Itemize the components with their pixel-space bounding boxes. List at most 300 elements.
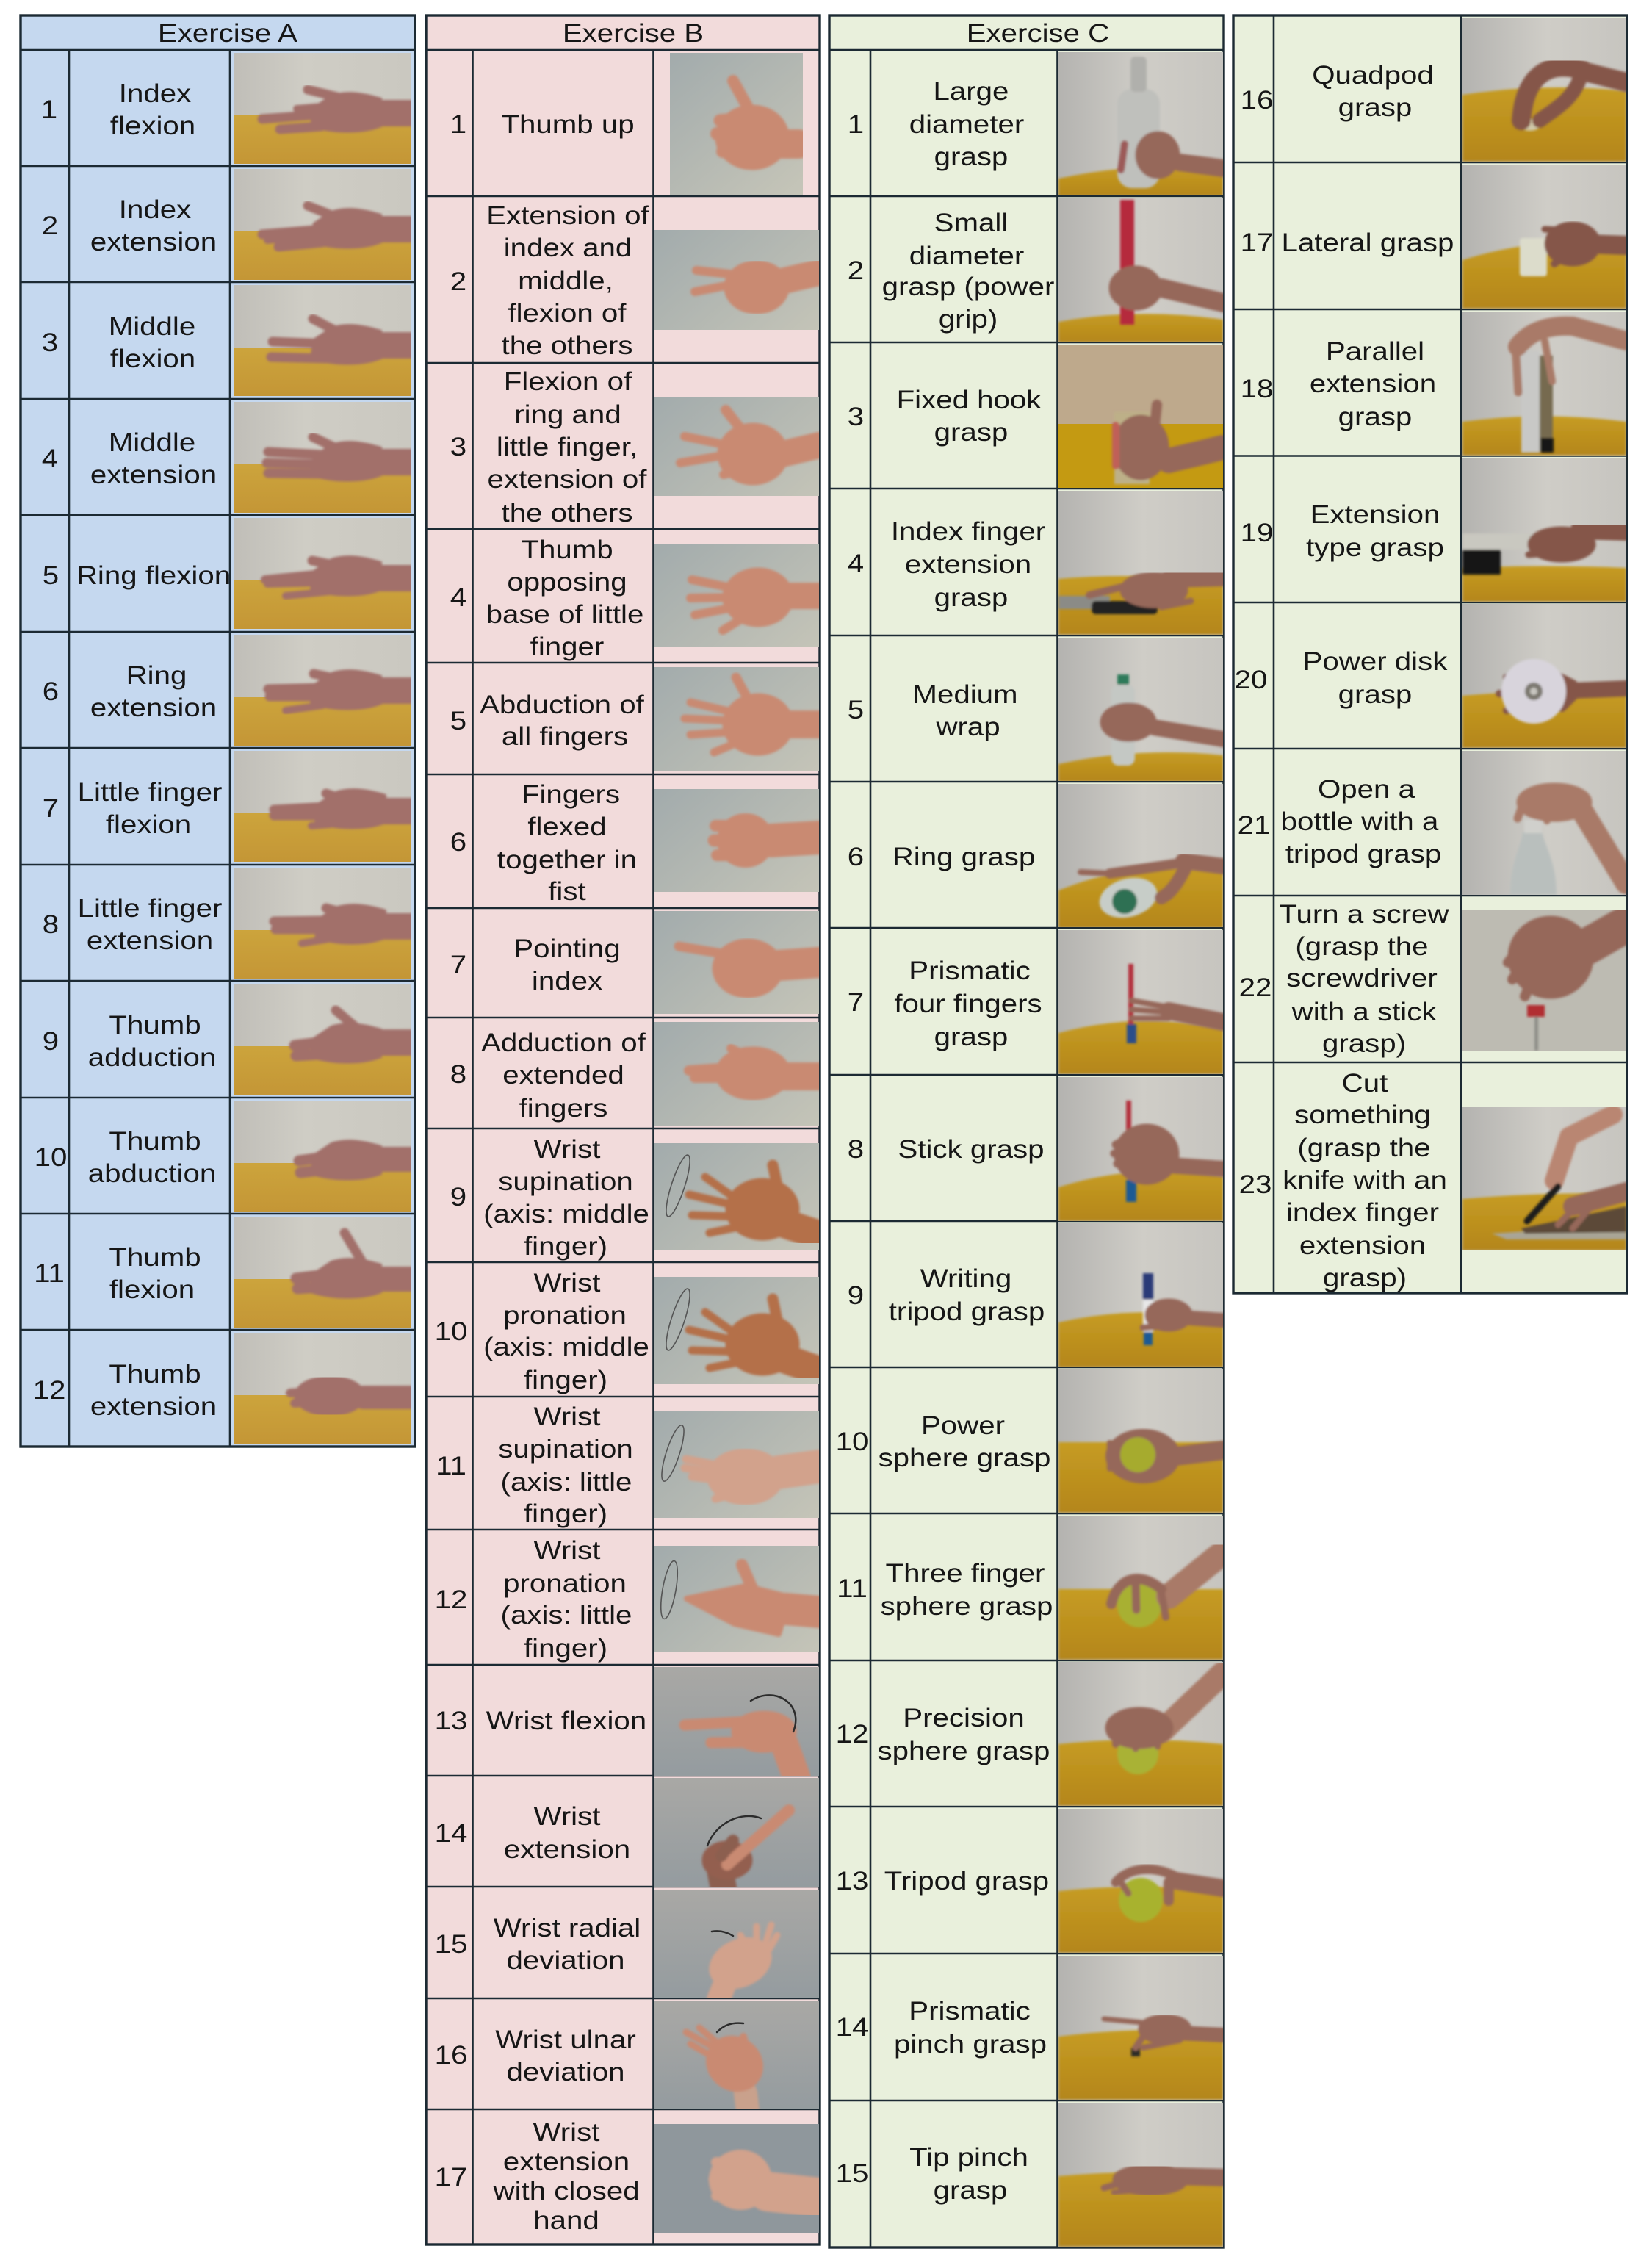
text: 10 Power sphere grasp: sphere grasp — [879, 1443, 1050, 1472]
text: 9 Thumb adduction: adduction — [88, 1043, 216, 1071]
row C7 — [848, 930, 1227, 1077]
text: 8 Stick grasp: 8 — [848, 1134, 864, 1163]
text: 11 Wrist supination (axis: little finger): finger) — [524, 1499, 607, 1527]
text: 7 Prismatic four fingers grasp: four fingers — [894, 989, 1042, 1018]
row C12 — [836, 1662, 1227, 1809]
text: 4 Index finger extension grasp: 4 — [848, 549, 864, 577]
text: 2 Extension of index and middle, flexion of the others: 2 — [450, 267, 466, 295]
photo: knife, index finger extension grasp — [1058, 491, 1227, 638]
text: 2 Extension of index and middle, flexion of the others: the others — [502, 331, 632, 359]
text: 14 Prismatic pinch grasp — [836, 1996, 1047, 2058]
text: 17 Wrist extension with closed hand: Wrist — [533, 2117, 600, 2146]
text: 2 Extension of index and middle, flexion of the others: middle, — [518, 266, 613, 295]
text: 7 Pointing index: index — [532, 966, 602, 995]
photo: wrist pronation, middle finger axis — [654, 1277, 819, 1384]
text: 23 Cut something (grasp the knife with an index finger extension grasp): something — [1294, 1100, 1431, 1128]
text: 3 Flexion of ring and little finger, extension of the others: 3 — [450, 432, 466, 461]
text: 3 Flexion of ring and little finger, extension of the others: ring and — [514, 400, 621, 428]
photo: power disk grasp, CD — [1462, 604, 1631, 751]
row B10 — [435, 1268, 823, 1424]
row B3 — [450, 367, 823, 544]
text: 7 Little finger flexion: flexion — [106, 810, 191, 838]
photo: precision sphere grasp — [1058, 1662, 1227, 1809]
row B5 — [450, 667, 823, 814]
text: 1 Index flexion: Index — [119, 79, 191, 107]
text: 4 Index finger extension grasp: Index finger — [891, 516, 1045, 545]
photo: wrist radial deviation — [654, 1890, 819, 1998]
text: 8 Adduction of extended fingers: 8 — [450, 1059, 466, 1088]
text: 12 Precision sphere grasp: 12 — [836, 1719, 868, 1748]
text: 13 Wrist flexion: 13 — [435, 1706, 467, 1735]
text: 23 Cut something (grasp the knife with an index finger extension grasp): extension — [1299, 1231, 1426, 1259]
photo: wrist flexion — [654, 1667, 819, 1776]
text: 3 Middle flexion: Middle — [109, 312, 195, 340]
text: 3 Fixed hook grasp: Fixed hook — [897, 385, 1042, 414]
photo: abduction of all fingers — [654, 667, 819, 771]
text: 8 Little finger extension: Little finger — [78, 893, 222, 922]
text: 19 Extension type grasp: 19 — [1241, 518, 1273, 547]
text: 21 Open a bottle with a tripod grasp — [1238, 774, 1441, 868]
heading: Exercise C: Exercise C — [967, 18, 1109, 47]
text: 12 Wrist pronation (axis: little finger): (axis: little — [501, 1600, 632, 1629]
text: 2 Index extension: extension — [90, 227, 217, 256]
row A2 — [42, 169, 411, 280]
photo: prismatic four fingers grasp — [1058, 930, 1227, 1077]
row C16 — [1241, 18, 1631, 165]
text: 6 Ring extension — [43, 660, 217, 721]
text: 16 Wrist ulnar deviation: Wrist ulnar — [495, 2025, 636, 2053]
text: 7 Pointing index — [450, 934, 621, 995]
text: 11 Thumb flexion: flexion — [109, 1275, 195, 1303]
text: 19 Extension type grasp: type grasp — [1306, 533, 1444, 561]
photo: prismatic pinch grasp — [1058, 1956, 1227, 2103]
text: 4 Thumb opposing base of little finger: finger — [530, 632, 604, 660]
photo: pointing index — [654, 911, 819, 1014]
text: 4 Middle extension — [42, 428, 217, 489]
text: 9 Writing tripod grasp: 9 — [848, 1281, 864, 1309]
text: 3 Flexion of ring and little finger, extension of the others: little finger, — [497, 432, 638, 461]
photo: ring flexion — [234, 518, 411, 629]
row B12 — [435, 1536, 823, 1693]
text: 1 Thumb up: 1 — [450, 109, 466, 138]
text: 15 Tip pinch grasp: grasp — [934, 2175, 1007, 2204]
text: 17 Wrist extension with closed hand: extension — [503, 2147, 630, 2175]
text: 1 Thumb up: Thumb up — [501, 109, 635, 138]
text: 1 Large diameter grasp — [848, 76, 1024, 170]
row C22 — [1239, 899, 1626, 1057]
row A10 — [35, 1101, 411, 1212]
photo: thumb extension — [234, 1333, 411, 1444]
text: 3 Fixed hook grasp: grasp — [934, 417, 1008, 446]
text: 23 Cut something (grasp the knife with an index finger extension grasp) — [1239, 1068, 1447, 1292]
text: 6 Fingers flexed together in fist: Fingers — [522, 780, 620, 808]
text: 21 Open a bottle with a tripod grasp: Open a — [1318, 774, 1415, 803]
text: 2 Small diameter grasp (power grip): 2 — [848, 256, 864, 284]
row A9 — [43, 984, 411, 1095]
text: 23 Cut something (grasp the knife with an index finger extension grasp): knife with an — [1283, 1165, 1447, 1194]
row C9 — [848, 1223, 1227, 1370]
text: 9 Writing tripod grasp — [848, 1264, 1045, 1325]
row A7 — [43, 751, 411, 862]
row C13 — [836, 1809, 1227, 1956]
text: 12 Thumb extension: extension — [90, 1392, 217, 1420]
row B9 — [450, 1134, 823, 1290]
text: 18 Parallel extension grasp: grasp — [1338, 402, 1412, 431]
text: 10 Power sphere grasp: Power — [921, 1411, 1005, 1439]
text: 5 Medium wrap: 5 — [848, 695, 864, 724]
text: 10 Thumb abduction: abduction — [88, 1159, 216, 1187]
text: 13 Tripod grasp: 13 — [836, 1866, 868, 1895]
text: 4 Thumb opposing base of little finger: Thumb — [521, 535, 613, 564]
text: 16 Quadpod grasp: Quadpod — [1312, 60, 1434, 89]
text: 22 Turn a screw (grasp the screwdriver with a stick grasp): with a stick — [1291, 997, 1437, 1026]
text: 6 Fingers flexed together in fist: fist — [548, 876, 586, 905]
text: 5 Medium wrap — [848, 680, 1018, 741]
photo: two fingers extended — [654, 230, 819, 330]
text: 23 Cut something (grasp the knife with an index finger extension grasp): 23 — [1239, 1170, 1272, 1198]
text: 13 Tripod grasp: Tripod grasp — [884, 1866, 1049, 1895]
text: 22 Turn a screw (grasp the screwdriver with a stick grasp): screwdriver — [1286, 963, 1438, 992]
text: 23 Cut something (grasp the knife with an index finger extension grasp): (grasp the — [1297, 1133, 1431, 1162]
row B7 — [450, 911, 823, 1058]
text: 4 Index finger extension grasp: grasp — [934, 583, 1008, 611]
row A5 — [43, 518, 411, 629]
text: 14 Wrist extension: 14 — [435, 1818, 467, 1847]
text: 12 Thumb extension: Thumb — [109, 1359, 201, 1388]
photo: index extension — [234, 169, 411, 280]
text: 4 Index finger extension grasp: extension — [905, 550, 1031, 578]
text: 7 Little finger flexion: 7 — [43, 793, 59, 822]
row C6 — [848, 784, 1227, 931]
photo: fist — [654, 789, 819, 892]
text: 6 Ring grasp: 6 — [848, 842, 864, 871]
text: 17 Wrist extension with closed hand: 17 — [435, 2162, 467, 2191]
text: 11 Thumb flexion: Thumb — [109, 1242, 201, 1271]
text: 8 Little finger extension: extension — [87, 926, 213, 954]
text: 3 Fixed hook grasp: 3 — [848, 402, 864, 431]
photo: wrist supination, middle finger axis — [654, 1143, 819, 1250]
text: 20 Power disk grasp: grasp — [1338, 680, 1412, 708]
text: 7 Prismatic four fingers grasp: Prismatic — [909, 956, 1031, 984]
text: 14 Wrist extension — [435, 1801, 630, 1863]
text: 22 Turn a screw (grasp the screwdriver with a stick grasp) — [1239, 899, 1449, 1057]
text: 9 Wrist supination (axis: middle finger): finger) — [524, 1231, 607, 1260]
text: 14 Prismatic pinch grasp: pinch grasp — [894, 2029, 1047, 2058]
text: 23 Cut something (grasp the knife with an index finger extension grasp): grasp) — [1323, 1263, 1407, 1292]
text: 11 Thumb flexion — [34, 1242, 201, 1303]
text: 17 Wrist extension with closed hand: with closed — [492, 2176, 640, 2205]
text: 8 Little finger extension: 8 — [43, 910, 59, 938]
text: 4 Thumb opposing base of little finger — [450, 535, 643, 660]
text: 7 Prismatic four fingers grasp: grasp — [934, 1022, 1008, 1051]
text: 1 Index flexion: 1 — [41, 95, 57, 123]
text: 19 Extension type grasp: Extension — [1310, 500, 1440, 528]
photo: little finger extension — [234, 868, 411, 979]
text: 3 Flexion of ring and little finger, extension of the others: Flexion of — [504, 367, 632, 395]
text: 11 Wrist supination (axis: little finger): Wrist — [534, 1402, 601, 1430]
text: 21 Open a bottle with a tripod grasp: 21 — [1238, 810, 1270, 839]
text: 6 Ring extension: 6 — [43, 677, 59, 705]
text: 7 Pointing index: 7 — [450, 950, 466, 979]
text: 23 Cut something (grasp the knife with an index finger extension grasp): index finger — [1286, 1198, 1439, 1226]
text: 6 Fingers flexed together in fist: flexed — [527, 812, 607, 840]
text: 3 Flexion of ring and little finger, extension of the others — [450, 367, 647, 527]
text: 17 Lateral grasp: 17 — [1241, 228, 1273, 256]
text: 2 Small diameter grasp (power grip): Small — [934, 208, 1008, 237]
text: 1 Large diameter grasp: 1 — [848, 109, 864, 138]
text: 2 Extension of index and middle, flexion of the others: Extension of — [486, 201, 649, 229]
text: 10 Wrist pronation (axis: middle finger): pronation — [503, 1300, 627, 1329]
text: 5 Ring flexion: Ring flexion — [76, 561, 231, 589]
row A1 — [41, 53, 411, 164]
text: 7 Little finger flexion: Little finger — [78, 777, 222, 806]
text: 2 Extension of index and middle, flexion of the others: index and — [504, 233, 632, 262]
text: 15 Tip pinch grasp: Tip pinch — [909, 2142, 1028, 2171]
text: 3 Fixed hook grasp — [848, 385, 1042, 446]
text: 22 Turn a screw (grasp the screwdriver with a stick grasp): Turn a screw — [1279, 899, 1449, 928]
row B6 — [450, 780, 823, 936]
text: 2 Index extension: Index — [119, 195, 191, 223]
photo: wrist extension with closed hand — [654, 2124, 819, 2233]
row B17 — [435, 2117, 819, 2234]
text: 16 Wrist ulnar deviation: deviation — [506, 2057, 625, 2086]
text: 9 Wrist supination (axis: middle finger): Wrist — [534, 1134, 601, 1163]
text: 11 Wrist supination (axis: little finger): supination — [498, 1434, 633, 1463]
text: 2 Small diameter grasp (power grip): diameter — [909, 241, 1024, 270]
text: 11 Thumb flexion: 11 — [34, 1259, 65, 1287]
photo: middle extension — [234, 402, 411, 513]
text: 5 Ring flexion: 5 — [43, 561, 59, 589]
text: 1 Large diameter grasp: diameter — [909, 109, 1024, 138]
photo: ring grasp, bottle on side — [1058, 784, 1227, 931]
text: 2 Extension of index and middle, flexion of the others: flexion of — [508, 298, 627, 327]
photo: stick grasp — [1058, 1077, 1227, 1224]
text: 3 Middle flexion: 3 — [42, 328, 58, 356]
panel: Exercise C continued — [1233, 15, 1631, 1293]
heading: Exercise A: Exercise A — [158, 18, 298, 47]
row B15 — [435, 1890, 823, 2037]
text: 16 Quadpod grasp — [1241, 60, 1434, 121]
text: 4 Index finger extension grasp — [848, 516, 1045, 611]
text: 8 Adduction of extended fingers — [450, 1028, 646, 1122]
text: 16 Wrist ulnar deviation: 16 — [435, 2040, 467, 2069]
text: 12 Thumb extension: 12 — [33, 1375, 65, 1404]
text: 2 Small diameter grasp (power grip): grasp (power — [882, 272, 1054, 300]
row B16 — [435, 2001, 823, 2148]
photo: wrist supination, little finger axis — [654, 1411, 819, 1518]
text: 11 Three finger sphere grasp: sphere grasp — [881, 1591, 1053, 1620]
photo: adduction of extended fingers — [654, 1022, 819, 1126]
text: 15 Wrist radial deviation: deviation — [506, 1945, 625, 1974]
row C20 — [1235, 604, 1631, 751]
photo: three finger sphere grasp — [1058, 1516, 1227, 1663]
text: 12 Thumb extension — [33, 1359, 217, 1420]
row C21 — [1238, 751, 1631, 898]
text: 1 Large diameter grasp: Large — [934, 76, 1009, 105]
row C17 — [1241, 165, 1631, 312]
text: 4 Middle extension: 4 — [42, 444, 58, 472]
photo: parallel extension grasp, book — [1462, 312, 1631, 458]
text: 11 Three finger sphere grasp — [837, 1558, 1053, 1620]
panel: Exercise B — [426, 15, 839, 2244]
row C18 — [1241, 312, 1631, 458]
text: 10 Wrist pronation (axis: middle finger): Wrist — [534, 1268, 601, 1297]
text: 5 Abduction of all fingers — [450, 690, 644, 750]
panel: Exercise C — [829, 15, 1227, 2250]
photo: thumb opposing — [654, 544, 819, 647]
text: 12 Wrist pronation (axis: little finger): Wrist — [534, 1536, 601, 1564]
text: 3 Flexion of ring and little finger, extension of the others: extension of — [487, 464, 647, 493]
text: 9 Thumb adduction — [43, 1010, 216, 1071]
text: 16 Wrist ulnar deviation — [435, 2025, 636, 2086]
row A4 — [42, 402, 411, 513]
text: 12 Wrist pronation (axis: little finger): pronation — [503, 1569, 627, 1597]
text: 2 Index extension: 2 — [42, 211, 58, 240]
text: 2 Index extension — [42, 195, 217, 256]
text: 15 Wrist radial deviation — [435, 1913, 641, 1974]
photo: thumb up — [670, 53, 803, 195]
photo: medium wrap, bottle — [1058, 638, 1227, 785]
row C11 — [837, 1516, 1227, 1663]
photo: thumb adduction — [234, 984, 411, 1095]
text: 1 Index flexion — [41, 79, 195, 140]
text: 6 Fingers flexed together in fist — [450, 780, 637, 905]
text: 2 Extension of index and middle, flexion of the others — [450, 201, 649, 359]
photo: middle flexion — [234, 285, 411, 396]
text: 6 Ring grasp: Ring grasp — [892, 842, 1035, 871]
text: 8 Adduction of extended fingers: extended — [502, 1060, 624, 1089]
text: 6 Ring extension: Ring — [126, 660, 187, 689]
text: 3 Middle flexion: flexion — [110, 344, 195, 372]
text: 15 Tip pinch grasp: 15 — [836, 2159, 868, 2187]
text: 21 Open a bottle with a tripod grasp: bottle with a — [1281, 807, 1438, 835]
photo: large bottle grasp — [1058, 52, 1223, 195]
text: 9 Thumb adduction: Thumb — [109, 1010, 201, 1039]
text: 9 Writing tripod grasp: Writing — [920, 1264, 1011, 1292]
text: 13 Wrist flexion: Wrist flexion — [486, 1706, 646, 1735]
text: 11 Wrist supination (axis: little finger): (axis: little — [501, 1467, 632, 1496]
text: 11 Three finger sphere grasp: 11 — [837, 1574, 868, 1602]
row C3 — [848, 345, 1223, 488]
text: 11 Wrist supination (axis: little finger) — [436, 1402, 633, 1527]
text: 18 Parallel extension grasp: 18 — [1241, 374, 1273, 403]
row C1 — [848, 52, 1227, 199]
text: 9 Thumb adduction: 9 — [43, 1026, 59, 1055]
row C5 — [848, 638, 1227, 785]
text: 17 Wrist extension with closed hand: hand — [533, 2206, 599, 2234]
text: 5 Abduction of all fingers: all fingers — [502, 721, 628, 750]
text: 10 Thumb abduction — [35, 1126, 216, 1187]
text: 23 Cut something (grasp the knife with an index finger extension grasp): Cut — [1342, 1068, 1388, 1097]
text: 9 Wrist supination (axis: middle finger): 9 — [450, 1182, 466, 1211]
text: 15 Tip pinch grasp — [836, 2142, 1028, 2204]
row B13 — [435, 1667, 823, 1814]
text: 16 Quadpod grasp: 16 — [1241, 85, 1273, 114]
photo: extension type grasp, plate — [1462, 458, 1631, 605]
text: 10 Wrist pronation (axis: middle finger): finger) — [524, 1365, 607, 1394]
text: 7 Prismatic four fingers grasp: 7 — [848, 987, 864, 1016]
text: 9 Wrist supination (axis: middle finger): supination — [498, 1167, 633, 1195]
text: 1 Index flexion: flexion — [110, 111, 195, 140]
row C19 — [1241, 458, 1631, 605]
text: 16 Quadpod grasp: grasp — [1338, 93, 1412, 121]
row C15 — [836, 2103, 1227, 2250]
text: 8 Stick grasp: Stick grasp — [898, 1134, 1045, 1163]
text: 5 Abduction of all fingers: Abduction of — [480, 690, 644, 719]
text: 12 Wrist pronation (axis: little finger) — [435, 1536, 632, 1662]
text: 12 Wrist pronation (axis: little finger): 12 — [435, 1585, 467, 1613]
photo: cutting with knife — [1462, 1107, 1631, 1254]
text: 9 Wrist supination (axis: middle finger): (axis: middle — [483, 1199, 649, 1228]
text: 4 Middle extension: extension — [90, 460, 217, 489]
photo: ring and little finger flexed — [654, 397, 819, 496]
row A8 — [43, 868, 411, 979]
photo: wrist ulnar deviation — [654, 2001, 819, 2109]
row C23 — [1239, 1068, 1631, 1292]
text: 6 Fingers flexed together in fist: 6 — [450, 827, 466, 856]
photo: tip pinch grasp — [1058, 2103, 1227, 2250]
text: 12 Precision sphere grasp: sphere grasp — [878, 1736, 1050, 1765]
text: 5 Medium wrap: wrap — [935, 712, 1000, 741]
text: 14 Wrist extension: extension — [504, 1835, 630, 1863]
photo: small tube grasp — [1058, 198, 1223, 342]
row C10 — [836, 1369, 1227, 1516]
text: 2 Small diameter grasp (power grip): grip) — [939, 304, 998, 333]
photo: tripod grasp, ball — [1058, 1809, 1227, 1956]
text: 11 Three finger sphere grasp: Three finger — [886, 1558, 1045, 1587]
text: 19 Extension type grasp — [1241, 500, 1444, 561]
text: 6 Fingers flexed together in fist: together in — [497, 845, 637, 874]
row B14 — [435, 1778, 823, 1925]
text: 20 Power disk grasp: Power disk — [1303, 647, 1448, 675]
text: 4 Thumb opposing base of little finger: 4 — [450, 583, 466, 611]
text: 5 Abduction of all fingers: 5 — [450, 706, 466, 735]
panel: Exercise A — [21, 15, 415, 1447]
text: 12 Precision sphere grasp: Precision — [903, 1703, 1025, 1732]
text: 9 Writing tripod grasp: tripod grasp — [889, 1297, 1045, 1325]
photo: little finger flexion — [234, 751, 411, 862]
text: 8 Adduction of extended fingers: fingers — [519, 1093, 607, 1122]
text: 10 Wrist pronation (axis: middle finger): 10 — [435, 1317, 467, 1345]
text: 14 Wrist extension: Wrist — [534, 1801, 601, 1830]
text: 11 Wrist supination (axis: little finger): 11 — [436, 1451, 466, 1480]
text: 17 Wrist extension with closed hand — [435, 2117, 640, 2234]
text: 4 Thumb opposing base of little finger: opposing — [507, 567, 627, 596]
text: 10 Wrist pronation (axis: middle finger) — [435, 1268, 649, 1394]
text: 18 Parallel extension grasp — [1241, 336, 1436, 431]
row C14 — [836, 1956, 1227, 2103]
heading: Exercise B: Exercise B — [563, 18, 704, 47]
row C4 — [848, 491, 1227, 638]
text: 10 Thumb abduction: Thumb — [109, 1126, 201, 1155]
text: 10 Thumb abduction: 10 — [35, 1142, 67, 1171]
row A11 — [34, 1217, 411, 1328]
text: 8 Adduction of extended fingers: Adduction of — [481, 1028, 646, 1056]
text: 14 Prismatic pinch grasp: Prismatic — [909, 1996, 1031, 2025]
text: 22 Turn a screw (grasp the screwdriver with a stick grasp): 22 — [1239, 973, 1272, 1001]
text: 15 Wrist radial deviation: 15 — [435, 1929, 467, 1958]
photo: wrist pronation, little finger axis — [654, 1546, 819, 1652]
text: 20 Power disk grasp — [1235, 647, 1448, 708]
text: 4 Thumb opposing base of little finger: base of little — [486, 600, 643, 628]
photo: lateral grasp — [1462, 165, 1631, 312]
text: 18 Parallel extension grasp: extension — [1310, 369, 1436, 397]
text: 6 Ring extension: extension — [90, 693, 217, 721]
text: 12 Precision sphere grasp — [836, 1703, 1050, 1765]
text: 3 Middle flexion — [42, 312, 195, 372]
photo: screwdriver stick grasp — [1462, 910, 1626, 1051]
photo: power sphere grasp — [1058, 1369, 1227, 1516]
